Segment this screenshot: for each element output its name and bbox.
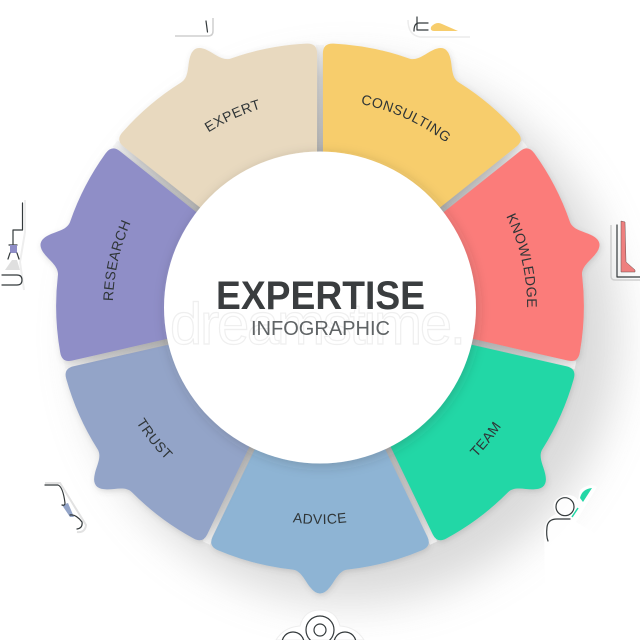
icon: trust fragment [45,483,86,532]
label: TRUST: TRUST [138,417,173,458]
icon: knowledge fragment [611,221,640,280]
subtitle: INFOGRAPHIC [251,318,390,340]
segment: knowledge [429,137,624,383]
label: RESEARCH: RESEARCH [103,220,130,300]
segment: expert [98,2,359,231]
icon: research fragment [2,200,25,290]
icon: expert fragment [175,18,213,36]
label: CONSULTING: CONSULTING [362,95,450,141]
segment gaps [64,45,576,545]
label: KNOWLEDGE: KNOWLEDGE [506,213,537,308]
background soft shadow [82,67,618,603]
segment: research [16,137,211,383]
icon: advice fragment [276,610,364,640]
icon: team fragment [544,485,640,640]
segment: advice [211,444,429,594]
segment: trust [28,307,281,571]
center circle [164,152,476,464]
label: EXPERT: EXPERT [204,99,258,132]
watermark: dreamstime. [170,292,466,357]
icon: consulting fragment [408,17,470,37]
label: ADVICE: ADVICE [292,512,346,524]
segment: consulting [281,2,542,231]
label: TEAM: TEAM [470,422,501,455]
segment: team [359,307,612,571]
title: EXPERTISE [216,274,425,318]
